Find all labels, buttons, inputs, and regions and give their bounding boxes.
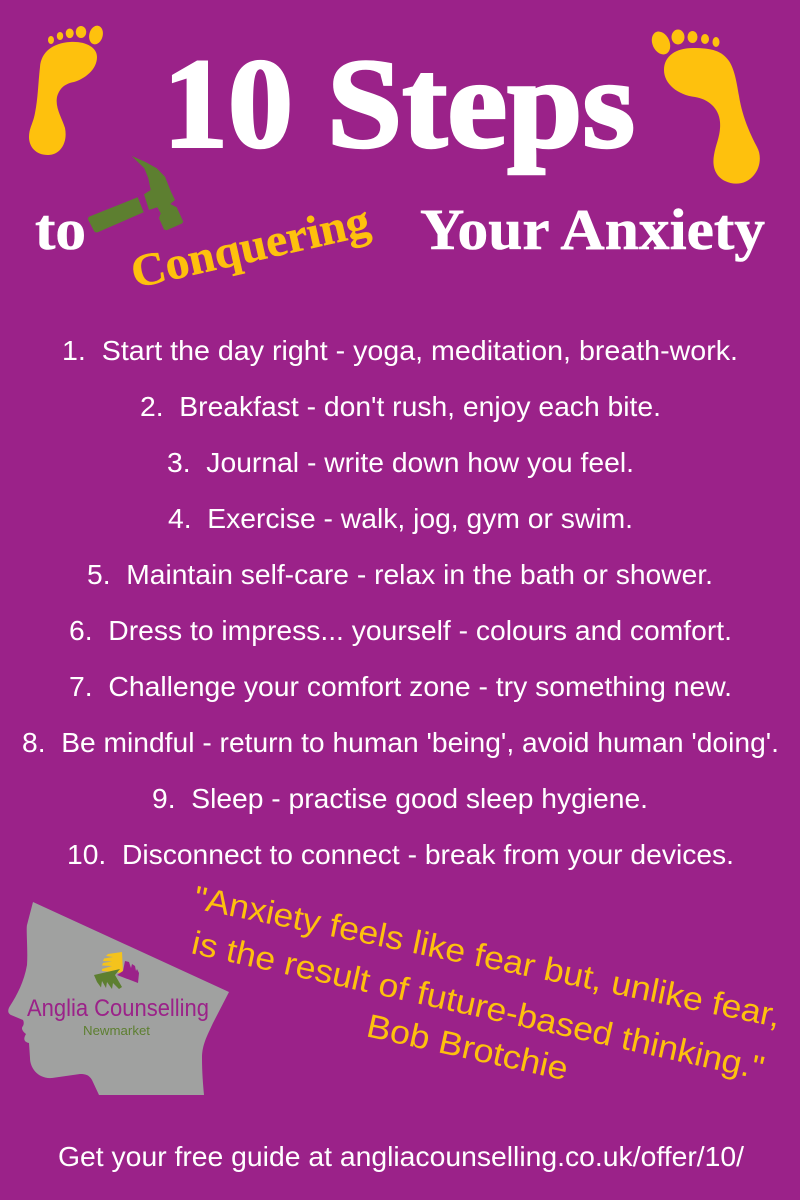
quote line 2: is the result of future-based thinking." xyxy=(188,924,768,1086)
subtitle: to: to xyxy=(35,197,86,262)
icon: right footprint xyxy=(648,29,760,184)
step 4: 4. Exercise - walk, jog, gym or swim. xyxy=(168,503,633,534)
step 7: 7. Challenge your comfort zone - try something new. xyxy=(69,671,732,702)
logo location: Newmarket xyxy=(83,1023,150,1038)
subtitle: conquering: Conquering xyxy=(126,195,374,298)
step 10: 10. Disconnect to connect - break from your devices. xyxy=(67,839,734,870)
logo mark: three hands xyxy=(94,952,139,989)
title: Steps xyxy=(327,32,635,174)
step 9: 9. Sleep - practise good sleep hygiene. xyxy=(152,783,648,814)
quote line 1: "Anxiety feels like fear but, unlike fear, xyxy=(191,879,784,1034)
title xyxy=(163,32,635,174)
step 3: 3. Journal - write down how you feel. xyxy=(167,447,634,478)
logo: Anglia Counselling head xyxy=(8,902,229,1095)
step 8: 8. Be mindful - return to human 'being', avoid human 'doing'. xyxy=(22,727,779,758)
quote attribution: Bob Brotchie xyxy=(363,1007,572,1087)
head silhouette xyxy=(8,902,229,1095)
subtitle: your anxiety: Your Anxiety xyxy=(420,197,765,262)
title: 10 xyxy=(163,32,293,174)
list of ten steps xyxy=(22,335,779,870)
step 5: 5. Maintain self-care - relax in the bath or shower. xyxy=(87,559,713,590)
step 2: 2. Breakfast - don't rush, enjoy each bite. xyxy=(140,391,661,422)
icon: left footprint xyxy=(29,24,105,155)
logo name: Anglia Counselling xyxy=(27,995,209,1022)
icon: hammer xyxy=(88,156,183,232)
footer call to action: Get your free guide at angliacounselling.co.uk/offer/10/ xyxy=(58,1141,744,1172)
step 6: 6. Dress to impress... yourself - colours and comfort. xyxy=(69,615,732,646)
quote xyxy=(188,879,784,1087)
step 1: 1. Start the day right - yoga, meditation, breath-work. xyxy=(62,335,738,366)
